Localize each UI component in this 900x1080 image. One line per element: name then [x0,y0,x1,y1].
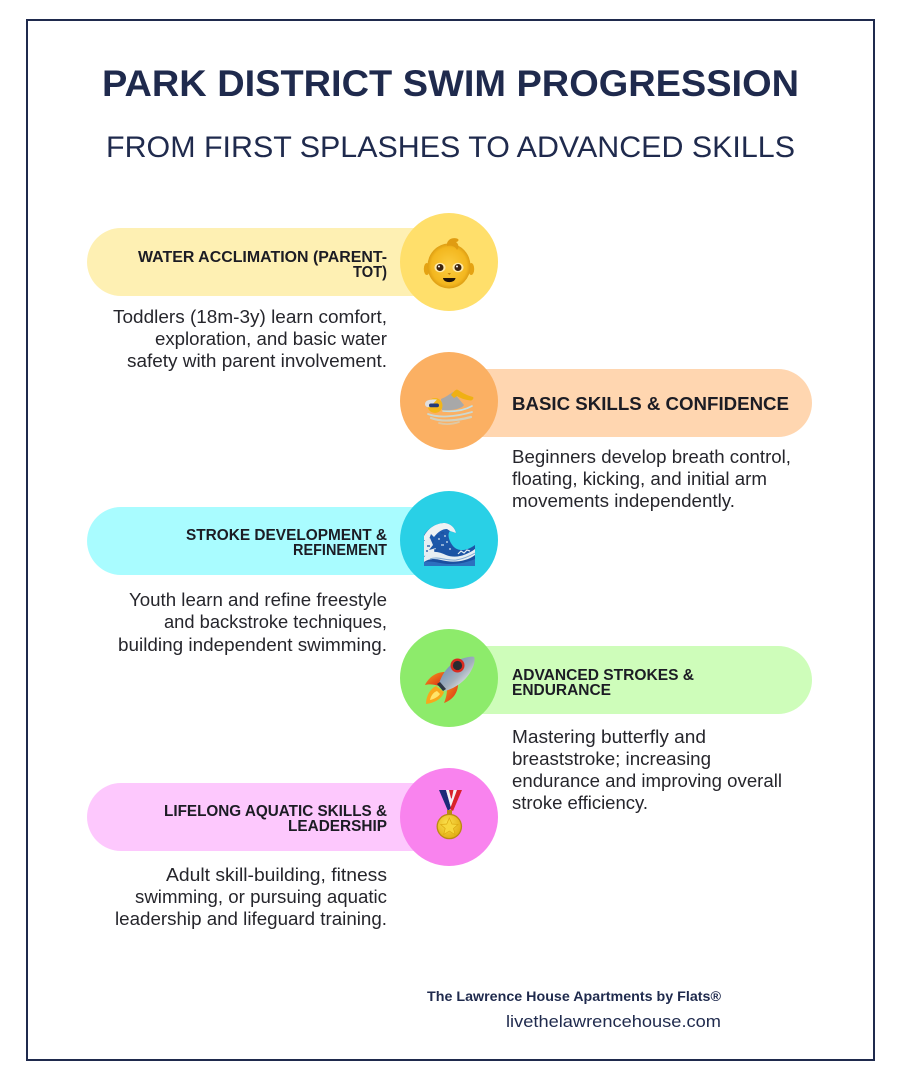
description: Mastering butterfly and [512,727,706,747]
description: endurance and improving overall [512,771,782,791]
heading [512,667,694,699]
description: breaststroke; increasing [512,749,711,769]
description: Toddlers (18m-3y) learn comfort, [113,307,387,327]
panel: lifelong skills [87,768,498,929]
subtitle: FROM FIRST SPLASHES TO ADVANCED SKILLS [106,131,795,164]
icon: swimmer [425,390,473,424]
description: Adult skill-building, fitness [166,865,387,885]
footer brand name: The Lawrence House Apartments by Flats® [427,988,722,1004]
heading [164,803,387,835]
description: safety with parent involvement. [127,351,387,371]
heading: LEADERSHIP [288,818,387,835]
pill [449,369,812,437]
description [113,307,387,371]
footer website: livethelawrencehouse.com [506,1012,721,1031]
heading: BASIC SKILLS & CONFIDENCE [512,394,789,414]
description [512,727,782,813]
pill [87,783,449,851]
panel: water acclimation [87,213,498,371]
description: building independent swimming. [118,635,387,655]
title: PARK DISTRICT SWIM PROGRESSION [102,63,799,104]
description: floating, kicking, and initial arm [512,469,767,489]
heading: REFINEMENT [293,542,387,559]
panel: stroke development [87,491,498,655]
icon: wave [424,523,475,566]
description: stroke efficiency. [512,793,648,813]
circle badge [400,629,498,727]
description [115,865,387,929]
description: movements independently. [512,491,735,511]
heading: WATER ACCLIMATION (PARENT- [138,249,387,266]
description: Beginners develop breath control, [512,447,791,467]
circle badge [400,491,498,589]
circle badge [400,768,498,866]
description: and backstroke techniques, [164,612,387,632]
footer [427,988,722,1031]
icon: baby face [424,238,474,288]
icon: medal [436,790,462,839]
heading: ENDURANCE [512,682,611,699]
heading: ADVANCED STROKES & [512,667,694,684]
heading [186,527,387,559]
icon: rocket [425,657,475,704]
pill [449,646,812,714]
pill [87,228,449,296]
description: swimming, or pursuing aquatic [135,887,387,907]
heading: TOT) [353,264,387,281]
description: exploration, and basic water [155,329,387,349]
heading: STROKE DEVELOPMENT & [186,527,387,544]
panel: advanced strokes [400,629,812,813]
heading [138,249,387,281]
description [118,590,387,655]
description: leadership and lifeguard training. [115,909,387,929]
pill [87,507,449,575]
description: Youth learn and refine freestyle [129,590,387,610]
panel: basic skills [400,352,812,511]
heading: LIFELONG AQUATIC SKILLS & [164,803,387,820]
circle badge [400,352,498,450]
description [512,447,791,511]
circle badge [400,213,498,311]
